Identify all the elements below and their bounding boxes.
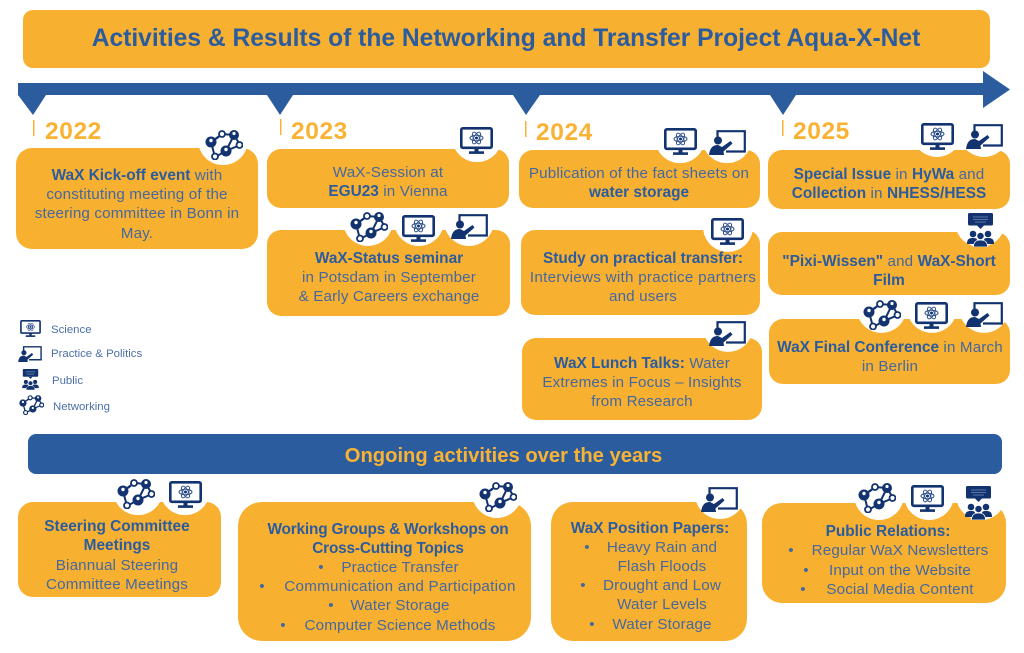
panel: public relations: Public Relations: — [826, 523, 950, 540]
panel: position papers: Heavy Rain and — [607, 539, 717, 556]
panel: EGU23 session — [267, 128, 509, 208]
panel: position papers: WaX Position Papers: — [571, 520, 729, 537]
panel: working groups: Computer Science Methods — [304, 617, 496, 634]
legend: Practice & Politics — [51, 348, 142, 360]
icon: networking — [206, 130, 242, 160]
panel: working groups: Practice Transfer — [341, 559, 459, 576]
panel: practical transfer study: and users — [609, 288, 677, 305]
panel: lunch talks — [522, 322, 762, 420]
icons: networking, science — [118, 479, 201, 508]
panel: special issue — [768, 124, 1010, 209]
panel: fact sheets — [519, 129, 760, 208]
panel: public relations: Input on the Website — [829, 562, 971, 579]
panel: lunch talks: WaX Lunch Talks: Water — [554, 355, 730, 372]
icons: networking, science, practice — [350, 212, 487, 242]
panel: public relations: Social Media Content — [826, 581, 974, 598]
panel: working groups: Working Groups & Workshops on — [267, 521, 509, 538]
panel: status seminar: in Potsdam in September — [302, 269, 476, 286]
panel: position papers: • — [589, 616, 595, 633]
year 2025: 2025 — [793, 118, 850, 145]
icons: science, practice — [665, 129, 745, 155]
panel: public relations: Regular WaX Newsletters — [812, 542, 989, 559]
panel: special issue: Collection in NHESS/HESS — [792, 185, 986, 202]
icon: practice — [701, 488, 737, 512]
panel: working groups: Communication and Participation — [284, 578, 516, 595]
year 2023: 2023 — [291, 118, 348, 145]
panel: public relations: • — [803, 562, 809, 579]
panel: working groups — [238, 482, 531, 641]
panel: Pixi-Wissen: "Pixi-Wissen" and WaX-Short — [782, 253, 996, 270]
panel: Pixi-Wissen: Film — [873, 272, 905, 289]
panel: final conference: in Berlin — [862, 358, 918, 375]
icons: networking, science, public — [858, 483, 992, 520]
panel: steering committee: Biannual Steering — [56, 557, 178, 574]
panel: steering committee: Committee Meetings — [46, 576, 188, 593]
icon: practice — [709, 322, 745, 346]
panel: kick-off 2022: steering committee in Bonn in — [35, 205, 239, 222]
panel: public relations: • — [788, 542, 794, 559]
panel: status seminar: & Early Careers exchange — [299, 288, 479, 305]
icon: public — [967, 213, 994, 247]
panel: working groups: • — [259, 578, 265, 595]
panel: public relations: • — [800, 581, 806, 598]
icons: networking, science, practice — [864, 300, 1002, 330]
panel: kick-off 2022 — [16, 130, 258, 249]
icon: science — [712, 219, 743, 245]
panel: practical transfer study — [521, 219, 760, 315]
panel: position papers: • — [584, 539, 590, 556]
year 2022: 2022 — [45, 118, 102, 145]
legend: Science — [51, 324, 92, 336]
icon: science — [461, 128, 492, 154]
panel: working groups: • — [280, 617, 286, 634]
title — [23, 10, 990, 68]
panel: lunch talks: from Research — [591, 393, 693, 410]
panel: fact sheets: water storage — [588, 184, 689, 201]
legend — [18, 321, 142, 415]
panel: fact sheets: Publication of the fact sheets on — [529, 165, 749, 182]
panel: position papers — [551, 488, 747, 641]
panel: practical transfer study: Interviews with practice partners — [530, 269, 756, 286]
panel: kick-off 2022: constituting meeting of the — [46, 186, 228, 203]
panel: steering committee: Meetings — [84, 537, 150, 554]
panel: public relations — [762, 483, 1006, 603]
panel: position papers: • — [580, 577, 586, 594]
timeline arrow — [18, 71, 1010, 115]
panel: final conference: WaX Final Conference in March — [777, 339, 1003, 356]
panel: working groups: • — [318, 559, 324, 576]
ongoing activities banner: Ongoing activities over the years — [345, 445, 662, 467]
panel: Pixi-Wissen — [768, 213, 1010, 295]
panel: kick-off 2022: May. — [121, 225, 153, 242]
panel: position papers: Drought and Low — [603, 577, 721, 594]
year 2024: 2024 — [536, 119, 593, 146]
panel: status seminar — [267, 212, 510, 316]
panel: status seminar: WaX-Status seminar — [315, 250, 463, 267]
panel: working groups: Water Storage — [350, 597, 450, 614]
panel: EGU23 session: EGU23 in Vienna — [328, 183, 448, 200]
panel: final conference — [769, 300, 1010, 384]
ongoing activities banner — [28, 434, 1002, 474]
legend: Public — [52, 375, 83, 387]
panel: lunch talks: Extremes in Focus – Insights — [542, 374, 742, 391]
icon: networking — [480, 482, 516, 512]
panel: position papers: Flash Floods — [618, 558, 707, 575]
panel: EGU23 session: WaX-Session at — [333, 164, 444, 181]
panel: kick-off 2022: WaX Kick-off event with — [52, 167, 222, 184]
panel: practical transfer study: Study on practical transfer: — [543, 250, 743, 267]
panel: position papers: Water Levels — [617, 596, 707, 613]
panel: position papers: Water Storage — [612, 616, 712, 633]
title: Activities & Results of the Networking and Transfer Project Aqua-X-Net — [92, 25, 920, 52]
panel: steering committee — [18, 479, 221, 597]
panel: special issue: Special Issue in HyWa and — [794, 166, 984, 183]
legend: Networking — [53, 401, 110, 413]
icons: science, practice — [922, 124, 1002, 150]
panel: working groups: • — [328, 597, 334, 614]
panel: working groups: Cross-Cutting Topics — [312, 540, 464, 557]
panel: steering committee: Steering Committee — [44, 518, 190, 535]
